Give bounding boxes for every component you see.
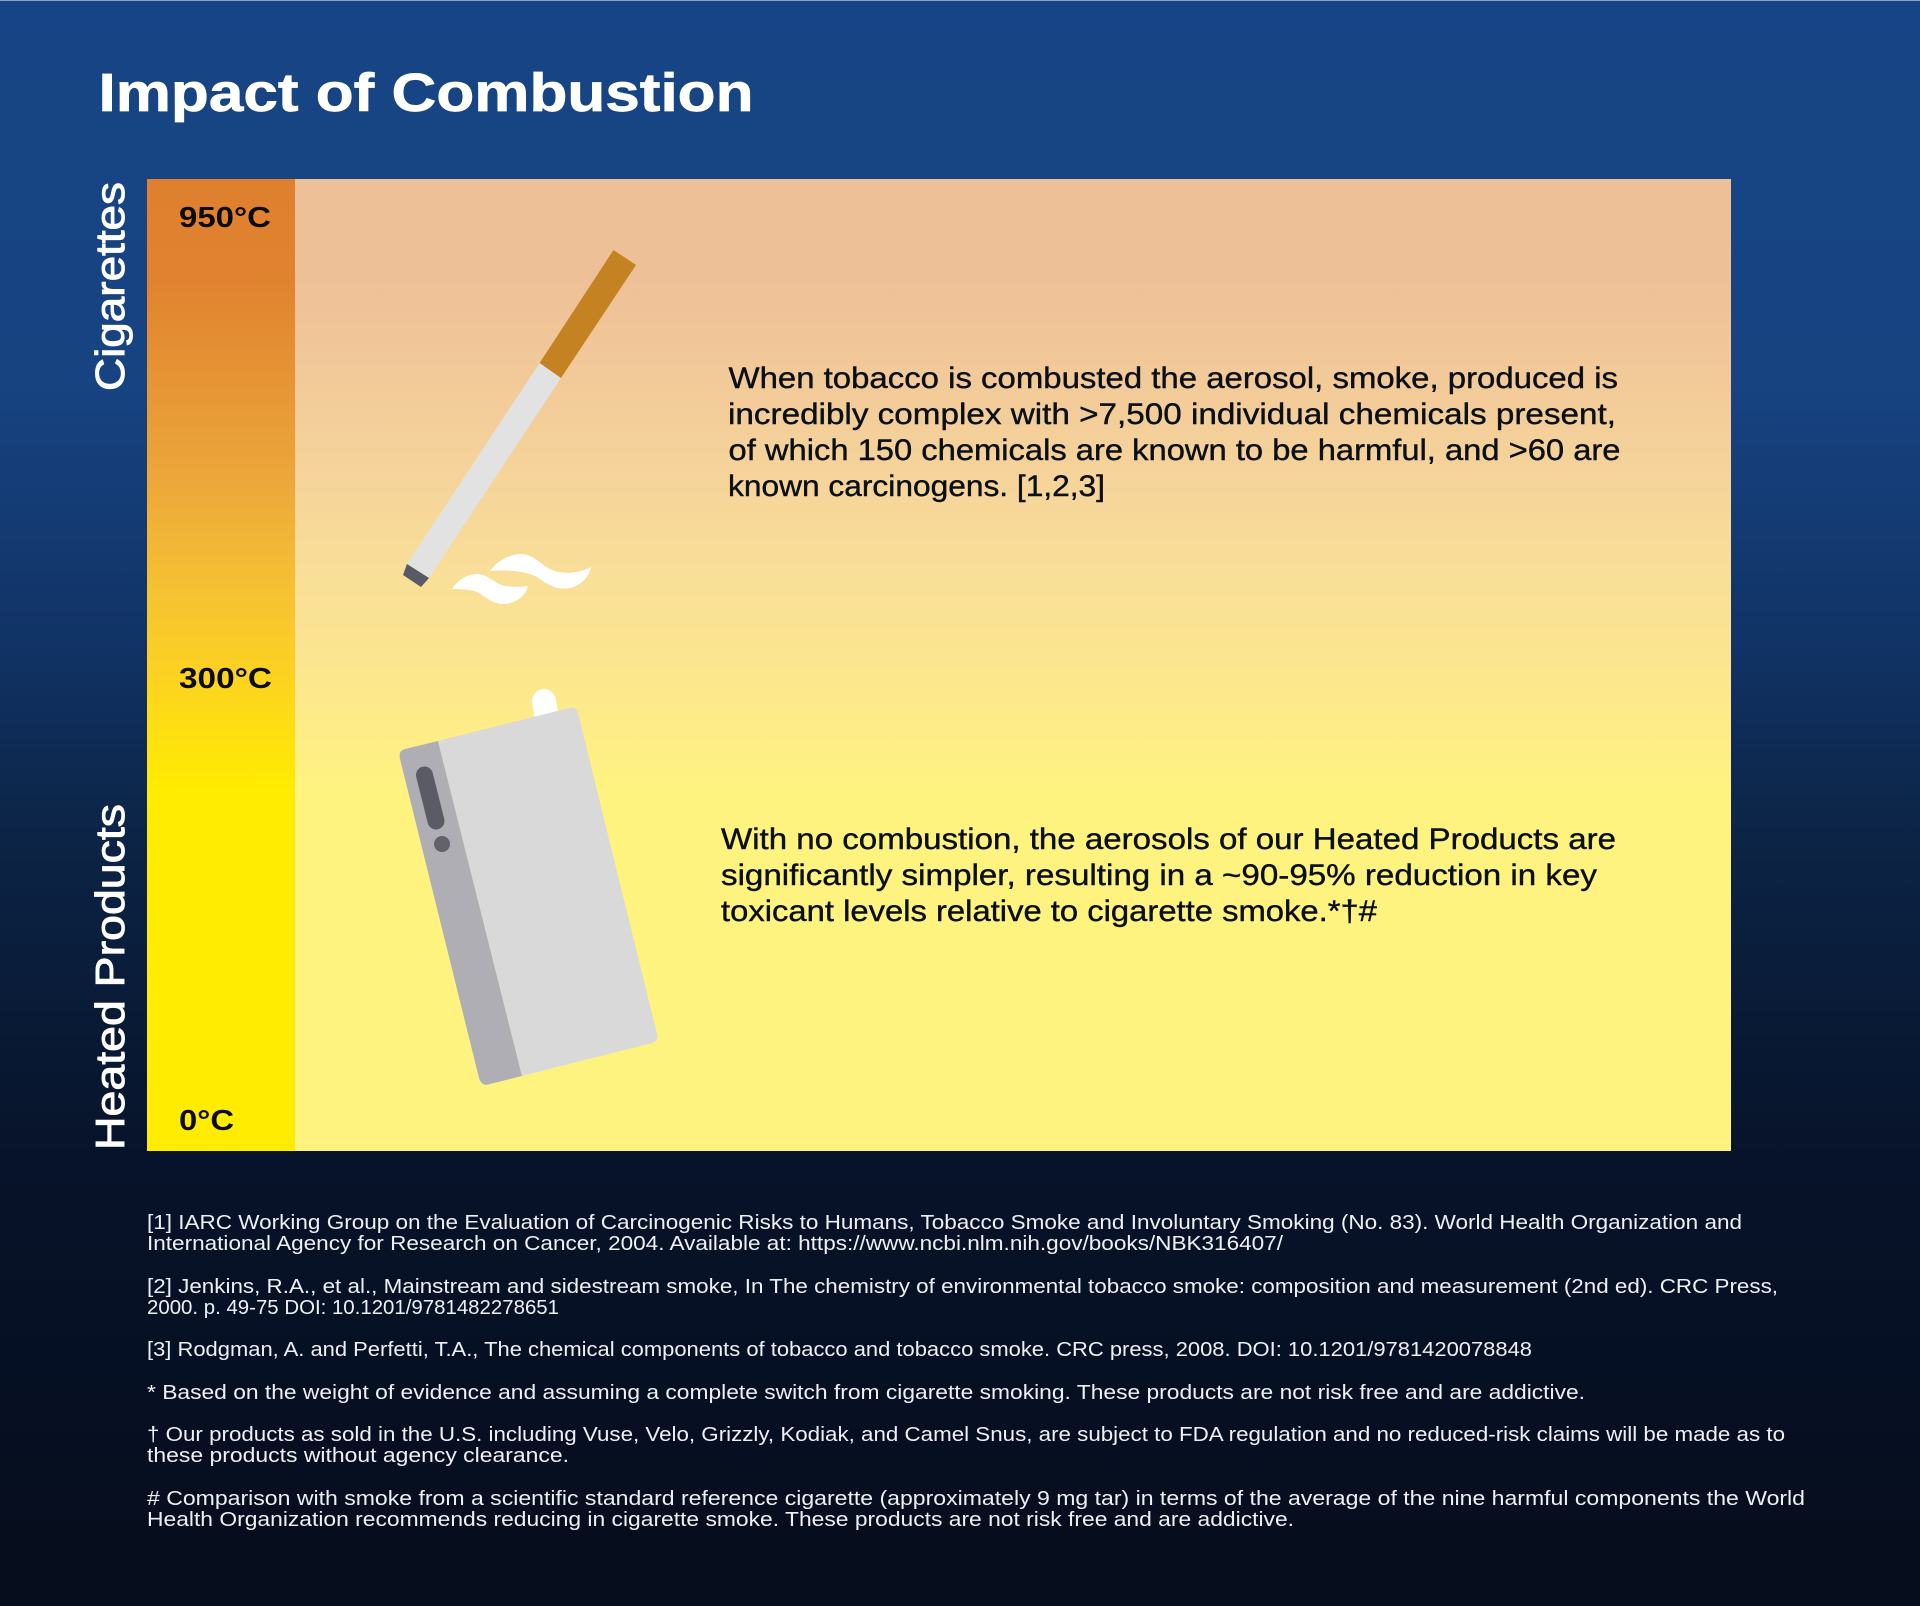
temperature label: 0°C: 0°C [179, 1105, 234, 1137]
device mouthpiece [544, 701, 548, 725]
text block: heated products aerosol: With no combustion, the aerosols of our Heated Products are [721, 823, 1616, 856]
text block: heated products aerosol: significantly simpler, resulting in a ~90-95% reduction in key [721, 859, 1597, 892]
footnote: dagger [147, 1424, 1785, 1467]
panel: comparison background [295, 179, 1731, 1151]
footnote: hash: # Comparison with smoke from a scientific standard reference cigarette (approximately 9 mg tar) in terms of the average of the nine harmful components the World [147, 1488, 1805, 1510]
footnotes and references [147, 1212, 1805, 1531]
reference 2: 2000. p. 49-75 DOI: 10.1201/9781482278651 [147, 1297, 559, 1319]
footnote: hash [147, 1488, 1805, 1531]
text block: combustion aerosol: known carcinogens. [1,2,3] [728, 470, 1105, 503]
vertical label: Heated Products: Heated Products [87, 804, 133, 1150]
reference 3: [3] Rodgman, A. and Perfetti, T.A., The chemical components of tobacco and tobacco smoke. CRC press, 2008. DOI: 10.1201/9781420078848 [147, 1339, 1532, 1361]
reference 1 [147, 1212, 1742, 1255]
footnote: dagger: † Our products as sold in the U.S. including Vuse, Velo, Grizzly, Kodiak, and Camel Snus, are subject to FDA regulation and no reduced-risk claims will be made as to [147, 1424, 1785, 1446]
temperature label: 300°C: 300°C [179, 663, 272, 695]
title: Impact of Combustion [98, 63, 754, 123]
device side strip [400, 741, 522, 1085]
icon: cigarette with smoke [403, 250, 636, 604]
cigarette body [407, 363, 561, 578]
temperature label: 950°C: 950°C [179, 202, 271, 234]
footnote: asterisk: * Based on the weight of evidence and assuming a complete switch from cigarette smoking. These products are not risk free and are addictive. [147, 1382, 1585, 1404]
cigarette filter [540, 250, 636, 378]
footnote: hash: Health Organization recommends reducing in cigarette smoke. These products are not risk free and are addictive. [147, 1509, 1294, 1531]
icon: heated product device [400, 701, 657, 1085]
vertical label: Cigarettes: Cigarettes [87, 182, 133, 391]
device indicator slot [424, 775, 436, 821]
text block: heated products aerosol: toxicant levels relative to cigarette smoke.*†# [721, 895, 1377, 928]
cigarette tip [403, 564, 429, 587]
text block: heated products aerosol [721, 823, 1616, 928]
text block: combustion aerosol: of which 150 chemicals are known to be harmful, and >60 are [728, 434, 1620, 467]
text block: combustion aerosol: incredibly complex with >7,500 individual chemicals present, [728, 398, 1616, 431]
reference 1: International Agency for Research on Cancer, 2004. Available at: https://www.ncbi.nlm.nih.gov/books/NBK316407/ [147, 1233, 1283, 1255]
smoke lower wisp [452, 574, 528, 604]
text block: combustion aerosol: When tobacco is combusted the aerosol, smoke, produced is [728, 362, 1618, 395]
reference 2 [147, 1276, 1778, 1319]
smoke upper wisp [490, 554, 591, 589]
device button [434, 836, 450, 852]
reference 2: [2] Jenkins, R.A., et al., Mainstream and sidestream smoke, In The chemistry of environmental tobacco smoke: composition and measurement (2nd ed). CRC Press, [147, 1276, 1778, 1298]
footnote: dagger: these products without agency clearance. [147, 1445, 569, 1467]
temperature scale bar [147, 179, 295, 1151]
text block: combustion aerosol [728, 362, 1620, 503]
device front face [438, 708, 657, 1076]
reference 1: [1] IARC Working Group on the Evaluation of Carcinogenic Risks to Humans, Tobacco Smoke and Involuntary Smoking (No. 83). World Health Organization and [147, 1212, 1742, 1234]
